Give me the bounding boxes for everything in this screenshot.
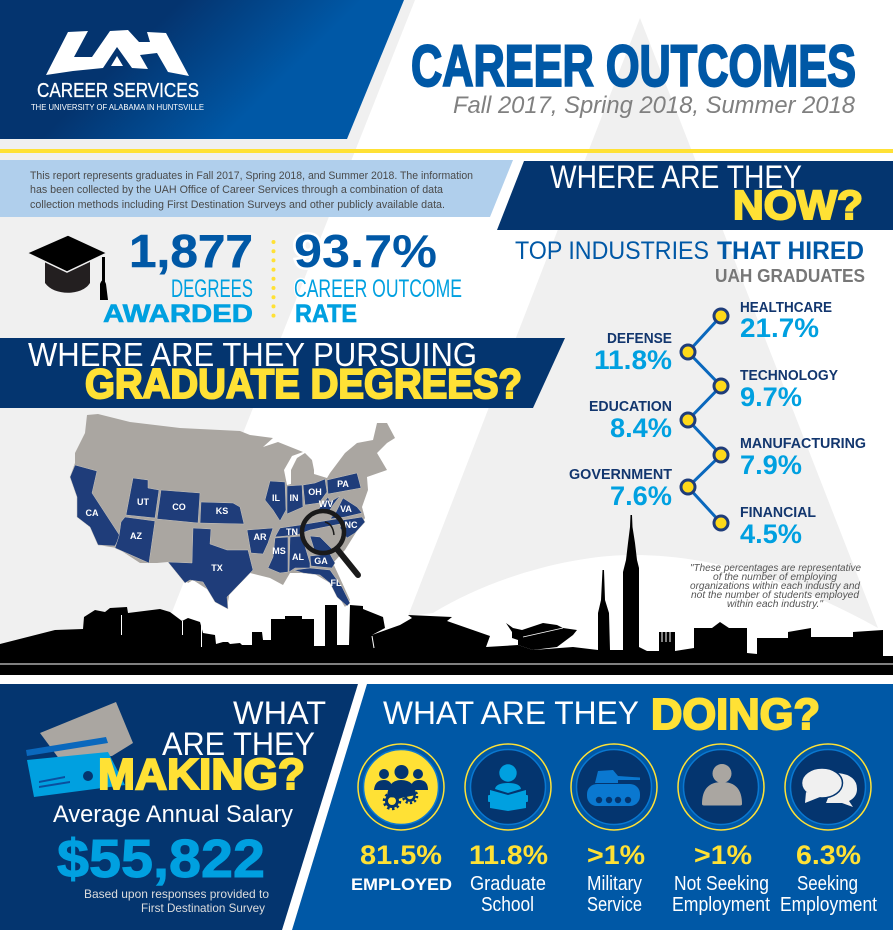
map: United States: PA: [337, 479, 349, 489]
chart: industry zigzag: 7.9%: [740, 450, 802, 480]
panel: what are they doing: [292, 684, 893, 930]
stat: military service: Service: [587, 894, 642, 916]
stat: graduate school: School: [481, 894, 534, 916]
map: United States: CA: [86, 508, 99, 518]
intro text block: [0, 160, 513, 217]
chart: industry zigzag: 9.7%: [740, 382, 802, 412]
panel: what are they doing: WHAT ARE THEY: [383, 695, 639, 731]
map: United States: AZ: [130, 531, 142, 541]
map: United States: GA: [314, 556, 328, 566]
panel: what are they making: Based upon responses provided to: [84, 887, 269, 901]
stat: military service: >1%: [587, 840, 645, 870]
map: United States: VA: [340, 504, 352, 514]
map: United States: KS: [216, 506, 228, 516]
stat: not seeking employment: >1%: [694, 840, 752, 870]
footnote: of the number of employing: [713, 572, 837, 583]
stat: seeking employment: [780, 840, 877, 916]
map: United States: NC: [344, 520, 358, 530]
chart: industry zigzag: 8.4%: [610, 413, 672, 443]
stat: graduate school: [469, 840, 548, 916]
dotted divider: [272, 242, 276, 316]
chart: industry zigzag: 21.7%: [740, 313, 819, 343]
chart: industry zigzag: FINANCIAL: [740, 505, 816, 521]
stat: degrees awarded: AWARDED: [103, 300, 253, 328]
intro text block: collection methods including First Destination Surveys and other publicly available data.: [30, 199, 445, 211]
footnote: "These percentages are representative: [690, 563, 861, 574]
intro text block: has been collected by the UAH Office of Career Services through a combination of data: [30, 184, 444, 196]
stat: employed: [351, 840, 452, 894]
heading: top industries: TOP INDUSTRIES: [515, 237, 709, 265]
heading: top industries: THAT HIRED: [717, 237, 864, 265]
icon: employed: [358, 744, 444, 830]
stat: graduate school: Graduate: [470, 873, 546, 895]
icon: graduate school: [465, 744, 551, 830]
icon: magnifying glass: [302, 511, 358, 575]
header panel with logo: [0, 0, 404, 139]
map: United States: IN: [290, 493, 298, 503]
map: United States: AL: [292, 552, 304, 562]
intro text block: This report represents graduates in Fall 2017, Spring 2018, and Summer 2018. The information: [30, 170, 473, 182]
banner: graduate degrees: GRADUATE DEGREES?: [85, 360, 522, 407]
chart: industry zigzag: EDUCATION: [589, 399, 672, 415]
banner: where are they now: WHERE ARE THEY: [550, 159, 802, 195]
chart: industry zigzag: DEFENSE: [607, 331, 672, 347]
banner: graduate degrees: [0, 336, 565, 408]
heading: top industries: [515, 237, 865, 286]
panel: what are they making: ARE THEY: [162, 726, 315, 762]
stat: career outcome rate: [294, 225, 462, 328]
subtitle: Fall 2017, Spring 2018, Summer 2018: [453, 92, 856, 119]
panel: what are they making: Average Annual Salary: [53, 801, 293, 828]
map: United States: TN: [286, 527, 298, 537]
map: United States: UT: [137, 497, 149, 507]
university name: THE UNIVERSITY OF ALABAMA IN HUNTSVILLE: [31, 102, 204, 112]
banner: where are they now: [497, 159, 893, 230]
stat: career outcome rate: 93.7%: [294, 225, 437, 277]
icon: credit cards: [26, 702, 133, 797]
panel: what are they making: $55,822: [57, 829, 265, 889]
chart: industry zigzag: 7.6%: [610, 481, 672, 511]
chart: industry zigzag: 4.5%: [740, 519, 802, 549]
stat: career outcome rate: RATE: [295, 300, 357, 328]
chart: industry zigzag: HEALTHCARE: [740, 300, 832, 316]
stat: employed: EMPLOYED: [351, 875, 452, 894]
stat: degrees awarded: [103, 225, 253, 328]
chart: industry zigzag: 11.8%: [594, 345, 672, 375]
stat: seeking employment: Employment: [780, 894, 877, 916]
footnote: organizations within each industry and: [690, 581, 860, 592]
chart: industry zigzag: TECHNOLOGY: [740, 368, 838, 384]
icon: UAH logo: [46, 30, 189, 76]
map: United States: [70, 414, 395, 609]
icon: seeking employment: [785, 744, 871, 830]
heading: top industries: UAH GRADUATES: [715, 266, 865, 286]
career services label: CAREER SERVICES: [37, 80, 199, 102]
icon: military service: [571, 744, 657, 830]
stat: not seeking employment: Not Seeking: [674, 873, 769, 895]
stat: career outcome rate: CAREER OUTCOME: [294, 275, 462, 303]
stat: degrees awarded: DEGREES: [171, 275, 253, 303]
map: United States: WV: [319, 499, 333, 509]
stat: seeking employment: Seeking: [797, 873, 858, 895]
panel: what are they making: [0, 684, 358, 930]
footnote: within each industry.": [727, 599, 823, 610]
panel: what are they making: MAKING?: [98, 750, 305, 799]
map: United States: CO: [172, 502, 186, 512]
map: United States: FL: [330, 578, 342, 588]
skyline silhouette: [0, 515, 893, 675]
map: United States: OH: [308, 487, 322, 497]
icon: not seeking employment: [678, 744, 764, 830]
icon: space shuttle: [506, 623, 577, 650]
map: United States: IL: [272, 493, 281, 503]
footnote: not the number of students employed: [691, 590, 859, 601]
stat: seeking employment: 6.3%: [796, 840, 861, 870]
panel: what are they making: First Destination Survey: [141, 901, 265, 915]
map: United States: AR: [254, 532, 267, 542]
icon: graduation cap: [27, 235, 108, 300]
panel: what are they making: WHAT: [233, 695, 326, 731]
stat: not seeking employment: Employment: [672, 894, 770, 916]
stat: employed: 81.5%: [360, 840, 442, 870]
banner: where are they now: NOW?: [733, 182, 863, 228]
chart: industry zigzag: MANUFACTURING: [740, 436, 866, 452]
map: United States: MS: [272, 546, 286, 556]
panel: what are they doing: DOING?: [651, 690, 820, 739]
stat: degrees awarded: 1,877: [129, 225, 253, 277]
yellow divider: [0, 149, 893, 153]
chart: industry zigzag: [569, 300, 866, 549]
footnote: [690, 563, 861, 610]
stat: military service: Military: [587, 873, 642, 895]
map: United States: TX: [211, 563, 223, 573]
stat: not seeking employment: [672, 840, 770, 916]
banner: graduate degrees: WHERE ARE THEY PURSUING: [28, 336, 477, 373]
stat: military service: [587, 840, 645, 916]
stat: graduate school: 11.8%: [469, 840, 548, 870]
chart: industry zigzag: GOVERNMENT: [569, 467, 672, 483]
